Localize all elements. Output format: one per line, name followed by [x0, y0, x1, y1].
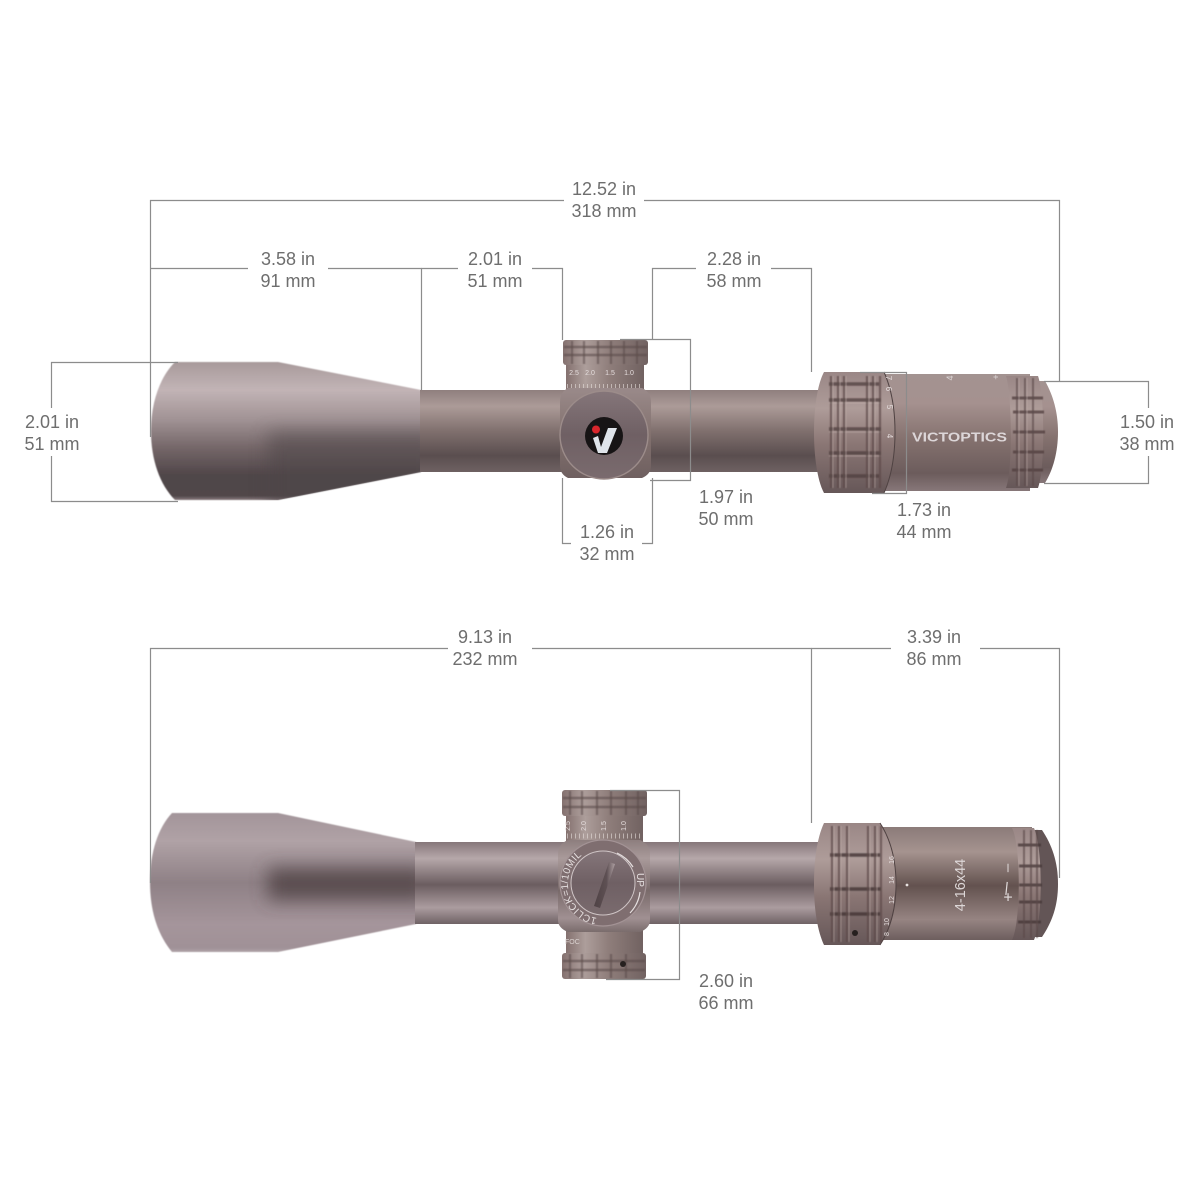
- eyepiece end cap: [1030, 830, 1058, 937]
- magnification ring: 4: [885, 434, 894, 439]
- dimension: 2.28 in: 2.28 in: [707, 249, 761, 269]
- dimension: 1.26 in: 1.26 in: [580, 522, 634, 542]
- dimension: 2.60 in: 66 mm: [698, 993, 754, 1013]
- turret lower knob: [562, 928, 646, 979]
- dimension: 3.39 in: 3.39 in: [907, 627, 961, 647]
- magnification scale: 10: [884, 918, 891, 926]
- dimension: 1.73 in: 44 mm: [896, 522, 952, 542]
- dimension: 2.28 in: 58 mm: [706, 271, 762, 291]
- turret top knob: [562, 790, 647, 842]
- dimension: 3.58 in: 91 mm: [260, 271, 316, 291]
- magnification scale: 8: [884, 932, 891, 936]
- dimension: 1.73 in: [860, 372, 952, 542]
- magnification ring: [814, 823, 896, 945]
- magnification ring: 7: [884, 376, 893, 381]
- dimension: overall length 12.52 in: 12.52 in: [572, 179, 636, 199]
- turret top knob: 1.0: [624, 370, 634, 377]
- objective bell and taper: [151, 362, 421, 500]
- dimension: overall length 12.52 in: 318 mm: [571, 201, 637, 221]
- dimension: 3.58 in: [150, 249, 422, 390]
- focus minus: –: [999, 863, 1016, 872]
- dimension: 2.01 in objective: 2.01 in: [25, 412, 79, 432]
- dimension: 1.97 in: 1.97 in: [699, 487, 753, 507]
- dimension: 3.39 in: [812, 627, 1060, 878]
- click value marking: 1CLICK=1/10MIL: [560, 852, 596, 924]
- top edge model marking: 4: [945, 375, 955, 381]
- dimension: overall length 12.52 in: [150, 179, 1060, 437]
- top edge focus marking: +: [991, 374, 1001, 380]
- magnification ring: 6: [884, 387, 893, 392]
- dimension: 2.01 in tube section: 51 mm: [467, 271, 523, 291]
- eyepiece knurl: [1012, 828, 1042, 940]
- dimension: 1.50 in: 1.50 in: [1120, 412, 1174, 432]
- turret lower knob: FOC: [565, 939, 580, 946]
- turret slot: [594, 862, 615, 908]
- eyepiece end cap: [1030, 381, 1058, 483]
- magnification scale: 14: [889, 876, 896, 884]
- magnification scale: [884, 856, 908, 936]
- turret dial: [560, 840, 646, 926]
- turret top knob: 2.5: [565, 821, 572, 831]
- scope: top view: [151, 340, 1058, 512]
- magnification ring: [814, 372, 895, 493]
- magnification scale: 12: [889, 896, 896, 904]
- turret top knob: 1.0: [621, 821, 628, 831]
- turret top knob: 2.5: [569, 370, 579, 377]
- focus plus: +: [1003, 890, 1013, 906]
- dimension: 1.73 in: 1.73 in: [897, 500, 951, 520]
- dimension: 1.50 in: [1044, 382, 1175, 484]
- dimension: 3.39 in: 86 mm: [906, 649, 962, 669]
- magnification scale: 16: [889, 856, 896, 864]
- dimension: 1.97 in: 50 mm: [698, 509, 754, 529]
- dimension: 2.60 in: [606, 790, 754, 1013]
- dimension: 2.01 in tube section: 2.01 in: [468, 249, 522, 269]
- dimension: 1.26 in: [562, 478, 652, 564]
- turret saddle: [558, 840, 650, 932]
- turret cap: [560, 391, 648, 479]
- dimension: 9.13 in: 232 mm: [452, 649, 518, 669]
- turret top knob: 1.5: [605, 370, 615, 377]
- dimension: 9.13 in: [150, 627, 812, 883]
- up marking: UP: [634, 873, 645, 887]
- magnification ring: 5: [885, 405, 894, 410]
- eyepiece body: [870, 827, 1032, 940]
- model marking: 4-16x44: [953, 859, 969, 911]
- turret top knob: [563, 340, 648, 390]
- dimension: 1.26 in: 32 mm: [579, 544, 635, 564]
- turret top knob: 1.5: [601, 821, 608, 831]
- dimension: 2.01 in tube section: [422, 249, 562, 340]
- dark shade on top view bell: [258, 424, 420, 500]
- logo: [585, 417, 623, 455]
- objective bell and taper: [150, 813, 416, 952]
- dimension: 2.28 in: [652, 249, 812, 372]
- brand label: VICTOPTICS: [912, 430, 1007, 444]
- scope: side view: [149, 790, 1058, 979]
- direction arc: [617, 853, 640, 913]
- main tube: [415, 842, 818, 924]
- turret top knob: 2.0: [581, 821, 588, 831]
- turret top knob: 2.0: [585, 370, 595, 377]
- eyepiece knurl: [1006, 376, 1045, 488]
- dimension: 2.01 in objective: 51 mm: [24, 434, 80, 454]
- dimension: 1.50 in: 38 mm: [1119, 434, 1175, 454]
- dimension: 2.60 in: 2.60 in: [699, 971, 753, 991]
- eyepiece body: [870, 374, 1030, 491]
- dimension: 3.58 in: 3.58 in: [261, 249, 315, 269]
- dimension: 1.97 in: [620, 340, 754, 529]
- divider mark: [1005, 882, 1008, 895]
- turret saddle: [560, 388, 651, 478]
- dark shade on bell: [268, 868, 428, 900]
- dimension: 2.01 in objective: [24, 362, 178, 502]
- dimension: 9.13 in: 9.13 in: [458, 627, 512, 647]
- main tube: [420, 390, 818, 472]
